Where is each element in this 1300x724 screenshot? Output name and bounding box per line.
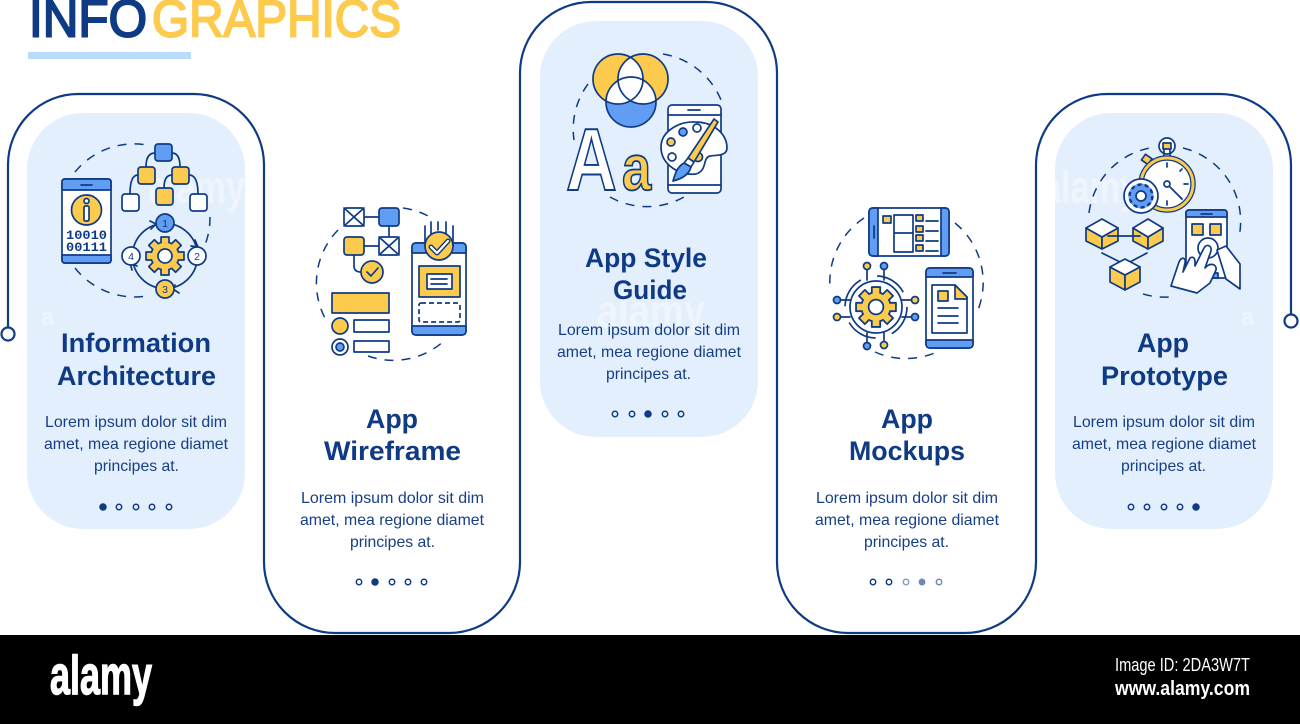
text: app mockups: [815, 490, 1000, 551]
text: app prototype: [1072, 414, 1257, 475]
pagination dots 5: [1128, 504, 1199, 510]
text: app wireframe: principes at.: [350, 534, 435, 551]
text: app mockups: amet, mea regione diamet: [815, 512, 1000, 529]
text: app style guide: Lorem ipsum dolor sit dim: [558, 322, 740, 339]
icon: information architecture: 2: [194, 251, 200, 263]
icon: information architecture: 00111: [66, 241, 107, 255]
heading: app wireframe: Wireframe: [324, 436, 461, 466]
text: app wireframe: amet, mea regione diamet: [300, 512, 485, 529]
heading: app style guide: App Style: [585, 243, 707, 273]
icon: style guide: [566, 54, 727, 209]
pagination dots 4: [870, 579, 942, 585]
title: [29, 0, 401, 48]
icon: information architecture: 4: [128, 251, 134, 263]
heading: app prototype: [1101, 328, 1228, 391]
heading: app prototype: Prototype: [1101, 361, 1228, 391]
text: app prototype: principes at.: [1121, 458, 1206, 475]
title underline: [28, 52, 191, 59]
footer logo: alamy: [50, 644, 152, 706]
text: information architecture: principes at.: [94, 458, 179, 475]
outline end node: [1284, 314, 1298, 328]
heading: information architecture: [57, 328, 216, 391]
heading: app wireframe: App: [366, 404, 418, 434]
text: app wireframe: [300, 490, 485, 551]
website: www.alamy.com: [1114, 678, 1250, 700]
text: app style guide: principes at.: [606, 366, 691, 383]
heading: app style guide: [585, 243, 707, 305]
heading: information architecture: Information: [61, 328, 211, 358]
icon: prototype: [1086, 138, 1241, 297]
watermark marks: [41, 161, 1255, 337]
watermark marks: alamy: [148, 161, 245, 213]
text: app prototype: Lorem ipsum dolor sit dim: [1073, 414, 1255, 431]
pagination dots 3: [612, 411, 684, 417]
heading: app mockups: App: [881, 404, 933, 434]
pagination dots 1: [100, 504, 172, 510]
heading: app style guide: Guide: [613, 275, 687, 305]
icon: mockups: [830, 208, 983, 359]
text: app mockups: Lorem ipsum dolor sit dim: [816, 490, 998, 507]
icon: information architecture: [62, 144, 210, 298]
panel backgrounds: [27, 21, 1273, 529]
icon: wireframe: [316, 208, 466, 360]
pagination dots 2: [356, 579, 427, 585]
heading: app wireframe: [324, 404, 461, 466]
watermark marks: alamy: [1042, 161, 1139, 213]
image id: Image ID: 2DA3W7T: [1115, 655, 1250, 675]
watermark marks: a: [41, 304, 55, 331]
footer bar: [0, 635, 1300, 724]
text: app style guide: amet, mea regione diamet: [557, 344, 742, 361]
text: app mockups: principes at.: [864, 534, 949, 551]
heading: information architecture: Architecture: [57, 361, 216, 391]
text: app prototype: amet, mea regione diamet: [1072, 436, 1257, 453]
watermark marks: alamy: [597, 285, 705, 337]
icon: information architecture: 1: [162, 218, 168, 230]
text: app style guide: [557, 322, 742, 383]
heading: app mockups: Mockups: [849, 436, 965, 466]
text: app wireframe: Lorem ipsum dolor sit dim: [301, 490, 484, 507]
watermark marks: a: [1241, 304, 1255, 331]
text: information architecture: amet, mea regione diamet: [44, 436, 229, 453]
heading: app prototype: App: [1137, 328, 1189, 358]
heading: app mockups: [849, 404, 965, 466]
outline start node: [2, 328, 14, 340]
icon: style guide: a: [622, 133, 652, 204]
icon: style guide: A: [566, 110, 617, 209]
icon: information architecture: 3: [162, 284, 168, 296]
icon: information architecture: 10010: [66, 229, 107, 243]
text: information architecture: Lorem ipsum dolor sit dim: [45, 414, 227, 431]
text: information architecture: [44, 414, 229, 475]
